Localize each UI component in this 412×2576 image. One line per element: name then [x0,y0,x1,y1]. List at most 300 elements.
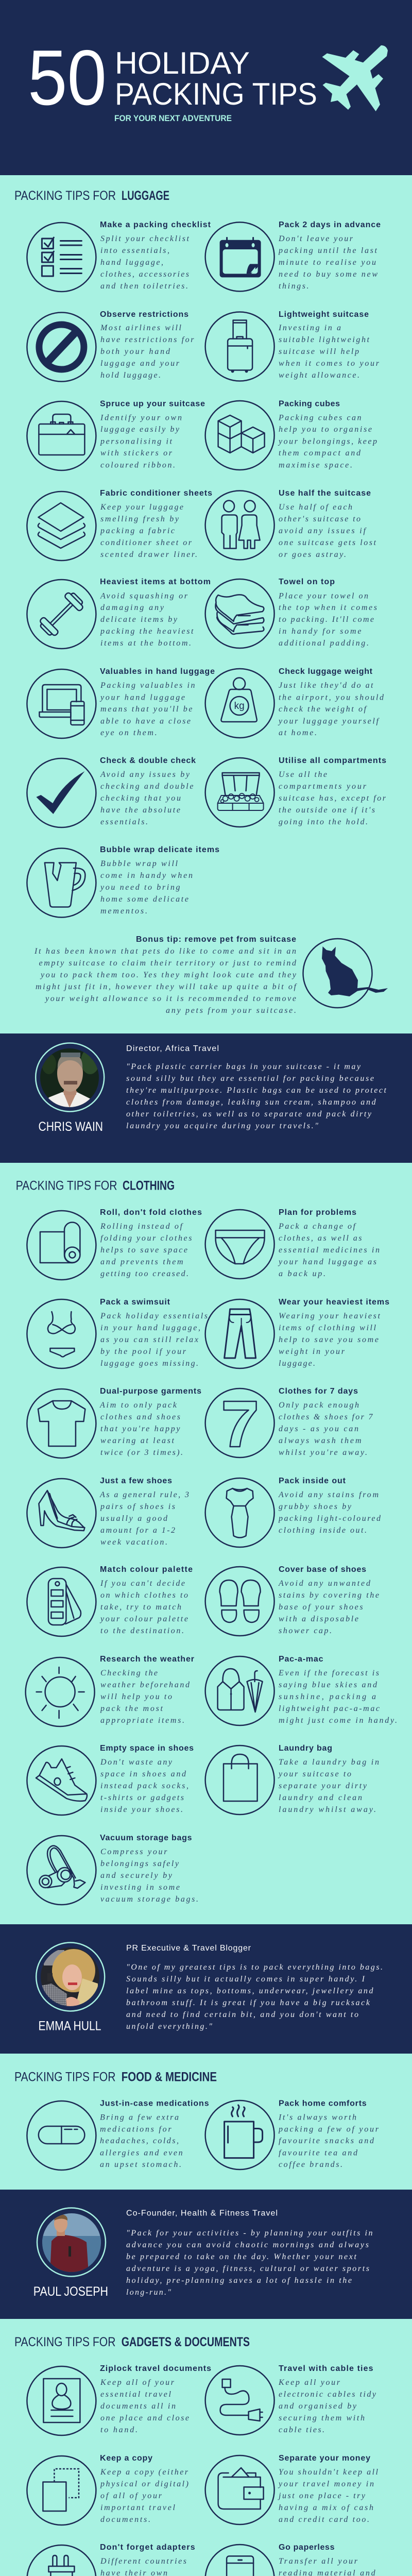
body text: inside your shoes. [100,1805,183,1814]
body text: means that you'll be [100,705,193,714]
body text [279,1401,373,1457]
body text: If you can't decide [100,1579,185,1588]
heading: Packing cubes [279,400,340,408]
body text: need to buy some new [279,270,377,279]
body text: physical or digital) [100,2480,188,2488]
body text: You shouldn't keep all [279,2468,379,2477]
panel: clothing tips [0,1163,412,1924]
body text: when it comes to your [279,359,380,368]
body text: always wash them [279,1436,362,1445]
icon: plug [27,2545,96,2576]
body text: packing a fabric [100,527,175,535]
body text: sunshine, packing a [279,1692,376,1701]
body text: your weight allowance so it is recommended to remove [44,994,296,1003]
body text: Packing cubes can [278,413,362,422]
body text [100,1758,188,1814]
body text: Pack a change of [278,1222,357,1231]
body text: one place and close [100,2414,189,2422]
body text: conditioner sheet or [100,538,192,547]
tip: valuables in hand luggage [27,667,215,738]
quote: advance you can avoid chaotic mornings and always [126,2241,369,2249]
heading: Make a packing checklist [100,221,211,229]
tip: packing cubes [205,400,377,470]
heading: packing tips for gadgets and documents: PACKING TIPS FOR [14,2335,115,2349]
body text: Avoid squashing or [100,591,188,600]
icon: shoe soles [205,1567,274,1636]
body text: packing until the last [278,246,377,255]
body text: take, try to match [100,1603,181,1612]
body text: clothes and shoes [100,1413,180,1421]
body text [100,2468,188,2524]
body text: empty suitcase to claim their territory or just to remind [39,959,297,968]
body text: them compact and [279,449,361,457]
body text: eye on them. [100,728,157,737]
body text: clothes & shoes for 7 [279,1413,373,1421]
heading: Travel with cable ties [279,2364,373,2373]
quote: holiday, pre-planning saves a lot of hassle in the [126,2276,352,2285]
body text: might just come in handy. [279,1716,397,1725]
body text: electronic cables tidy [279,2390,376,2399]
body text: packing light-coloured [278,1514,381,1523]
body text: and then toiletries. [100,282,188,291]
body text: going into the hold. [279,818,368,826]
body text: Split your checklist [100,234,190,243]
body text [278,2468,379,2524]
body text: additional padding. [279,639,369,648]
icon: briefs [205,1210,274,1279]
body text: your suitcase to [278,1770,351,1778]
tip: pack inside out [205,1477,381,1547]
body text [99,1401,183,1457]
body text: amount for a 1-2 [100,1526,175,1535]
quote: Sounds silly but it actually comes in super handy. I [126,1975,365,1984]
heading: Roll, don't fold clothes [100,1208,202,1217]
heading: Pack a swimsuit [100,1298,170,1307]
heading: packing tips for clothing: PACKING TIPS FOR [16,1178,117,1193]
body text: to packing. It'll come [279,615,374,624]
quote: long-run." [126,2288,171,2297]
heading: Go paperless [279,2543,335,2552]
body text: Take a laundry bag in [279,1758,379,1767]
body text: getting too creased. [100,1269,188,1278]
tip: observe restrictions [27,310,194,381]
tip: check luggage weight [205,667,384,738]
body text: weather beforehand [100,1681,190,1689]
body text: might just fit in, however they will take up quite a bit of [36,982,298,991]
body text [100,591,194,648]
photo: paul joseph [37,2208,106,2276]
body text [278,1669,397,1725]
body text: in handy for some [279,627,362,636]
heading: Laundry bag [279,1744,332,1753]
panel: quote chris wain [35,1042,386,1131]
body text: As a general rule, 3 [99,1490,189,1499]
icon: number seven [205,1388,274,1458]
panel: quote paul joseph [34,2207,372,2297]
heading: Pack home comforts [279,2099,367,2108]
quote: label mine as tops, bottoms, underwear, jewellery and [126,1987,374,1995]
body text [100,1222,192,1278]
body text: securing them with [279,2414,365,2422]
tip: heaviest items at bottom [27,578,211,649]
body text: delicate items by [100,615,178,624]
body text [278,1579,379,1635]
body text: twice (or 3 times). [100,1448,183,1457]
body text: help you to organise [279,425,372,434]
body text: coloured ribbon. [100,461,175,469]
body text: It's always worth [278,2113,356,2122]
body text [99,859,193,916]
body text: base of your shoes [279,1603,363,1612]
body text: personalising it [100,437,173,446]
body text [100,503,197,559]
body text: weight allowance. [279,371,359,380]
body text: suitcase will help [279,347,359,356]
body text: space in shoes and [100,1770,186,1778]
body text: and prevents them [100,1258,183,1266]
heading: Don't forget adapters [100,2543,195,2552]
body text: help to save you some [279,1335,379,1344]
body text [100,413,182,469]
body text: Only pack enough [279,1401,359,1410]
heading: Towel on top [279,578,335,586]
body text: suitcase has, except for [279,794,386,803]
heading: Just-in-case medications [100,2099,209,2108]
icon: cat [303,939,388,1008]
icon: document copy [27,2456,96,2525]
body text: the airport, you should [279,693,384,702]
body text: you need to bring [99,883,180,892]
body text: headaches, colds, [100,2137,179,2145]
body text: your travel money in [278,2480,374,2488]
body text [100,1312,208,1368]
heading: Bonus tip: remove pet from suitcase [136,935,296,944]
heading: Empty space in shoes [100,1744,194,1753]
tip: clothes for 7 days [205,1387,373,1458]
body text: clothing inside out. [279,1526,367,1535]
tip: keep a copy [27,2454,188,2525]
body text: days - as you can [279,1425,358,1433]
heading: Ziplock travel documents [100,2364,211,2373]
tip: separate your money [205,2454,379,2524]
heading: Valuables in hand luggage [100,667,215,676]
body text [34,947,298,1015]
body text: or goes astray. [279,550,346,559]
body text: as you can still relax [100,1335,198,1344]
body text: Identify your own [100,413,182,422]
body text [278,1222,380,1278]
tip: wear your heaviest items [205,1298,389,1368]
body text: hold luggage. [100,371,161,380]
body text: compartments your [279,782,367,791]
body text: items at the bottom. [100,639,191,648]
icon: checkmark [27,758,96,827]
body text: Avoid any unwanted [278,1579,371,1588]
photo: chris wain [36,1043,104,1112]
body text [100,770,194,826]
quote: "Pack for your activities - by planning your outfits in [126,2229,372,2238]
body text: both your hand [100,347,170,356]
icon: sun [26,1657,95,1726]
heading: Just a few shoes [100,1477,172,1485]
body text: minute to realise you [279,258,376,267]
icon: rolled fabric [27,1211,96,1280]
body text: usually a good [100,1514,168,1523]
title: holiday: HOLIDAY [115,46,250,80]
heading: Cover base of shoes [279,1565,366,1574]
role: PR Executive & Travel Blogger [126,1944,251,1953]
title: 50: 50 [28,34,107,122]
body text: Don't waste any [100,1758,173,1767]
heading: Clothes for 7 days [279,1387,358,1396]
body text: any pets from your suitcase. [166,1006,296,1015]
icon: steaming mug [205,2100,274,2170]
heading: Check luggage weight [279,667,373,676]
body text: favourite snacks and [279,2137,374,2145]
icon: vacuum cleaner [27,1836,96,1905]
icon: broken mug [27,848,96,917]
body text: essential travel [100,2390,171,2399]
name: EMMA HULL [38,2019,101,2033]
tip: pack a swimsuit [27,1298,208,1368]
body text: luggage easily by [100,425,180,434]
body text: an upset stomach. [100,2160,181,2169]
body text: Avoid any issues by [100,770,190,779]
body text: mementos. [100,907,147,916]
body text: Bring a few extra [100,2113,179,2122]
body text: that you're happy [100,1425,180,1433]
body text: Most airlines will [100,324,182,332]
body text: coffee brands. [279,2160,342,2169]
icon: id document [27,2366,96,2435]
icon: no sign [27,312,96,381]
quote: and need to find certain bit, and you don't want to [126,2010,358,2019]
tip: research the weather [26,1655,194,1726]
body text [278,1490,381,1535]
tip: packing checklist [27,221,211,292]
body text: into essentials, [100,246,169,255]
tip: pack home comforts [205,2099,379,2170]
heading: Pack 2 days in advance [279,221,381,229]
name: CHRIS WAIN [38,1120,103,1134]
body text [278,681,384,737]
icon: dumbbell [27,580,96,649]
body text: your belongings, keep [278,437,377,446]
icon: sneaker [27,1746,96,1815]
quote: bathroom stuff. It is great if you have a big rucksack [126,1998,370,2007]
body text: allergies and even [100,2149,183,2158]
body text: saying blue skies and [279,1681,377,1689]
name: PAUL JOSEPH [33,2284,108,2299]
heading: packing tips for luggage: LUGGAGE [122,189,169,203]
tip: match colour palette [27,1565,193,1636]
heading: Heaviest items at bottom [100,578,211,586]
body text: your luggage yourself [278,717,380,725]
body text: favourite tea and [279,2149,358,2158]
body text: the top when it comes [279,603,377,612]
heading: Pac-a-mac [279,1655,323,1664]
heading: Bubble wrap delicate items [100,845,219,854]
body text: will help you to [100,1692,172,1701]
body text: t-shirts or gadgets [100,1793,184,1802]
tip: fabric conditioner sheets [27,489,212,561]
quote: sound silly but they are essential for packing because [126,1074,374,1083]
body text: essential medicines in [279,1246,380,1255]
body text: damaging any [100,603,164,612]
quote: "One of my greatest tips is to pack everything into bags. [126,1963,383,1972]
body text: suitable lightweight [279,335,370,344]
icon: kg weight: kg [234,701,245,711]
body text [100,2557,189,2576]
quote: unfold everything." [126,2022,212,2031]
body text: your colour palette [99,1615,188,1623]
body text: shower cap. [279,1626,332,1635]
body text: by the pool if your [100,1347,186,1356]
body text: essentials. [100,818,148,826]
body text [279,2557,376,2576]
icon: calendar [205,222,274,291]
body text: Keep a copy (either [100,2468,188,2477]
body text [100,1848,198,1904]
quote: "Pack plastic carrier bags in your suitcase - it may [126,1062,361,1071]
body text: luggage and your [100,359,180,368]
heading: packing tips for food and medicine: PACKING TIPS FOR [14,2070,115,2084]
icon: couple [205,490,274,560]
tip: ziplock travel documents [27,2364,211,2435]
body text: vacuum storage bags. [100,1895,198,1904]
body text: come in handy when [100,871,193,880]
body text: Compress your [100,1848,167,1856]
quote: adventure is a yoga, fitness, cultural or water sports [126,2264,369,2273]
heading: Check & double check [100,756,196,765]
tip: towel on top [205,578,377,648]
body text: checking and double [100,782,194,791]
body text [278,591,377,648]
tip: just-in-case medications [27,2099,209,2170]
body text: instead pack socks, [100,1782,188,1790]
body text: the outside one if it's [279,806,375,815]
icon: briefcase [27,401,96,470]
heading: packing tips for luggage: PACKING TIPS FOR [14,189,116,203]
body text: helps to save space [100,1246,187,1255]
body text [100,2113,183,2169]
body text: check the weight of [279,705,368,714]
body text: and organised by [279,2402,357,2411]
tip: just a few shoes [27,1477,189,1548]
icon: stacked sheets [27,492,96,561]
heading: packing tips for food and medicine: FOOD & MEDICINE [122,2070,217,2084]
body text: lightweight pac-a-mac [279,1704,380,1713]
tip: bonus remove pet from suitcase [34,935,388,1015]
tip: roll don't fold [27,1208,202,1280]
panel: gadgets and documents tips [0,2319,412,2576]
heading: Research the weather [100,1655,194,1664]
body text: to the destination. [100,1626,184,1635]
body text: laundry whilst away. [279,1805,376,1814]
heading: packing tips for clothing: CLOTHING [123,1178,175,1193]
body text: grubby shoes by [279,1502,352,1511]
tip: bubble wrap delicate items [27,845,219,917]
body text [100,324,194,380]
icon: colour swatch [27,1567,96,1636]
body text [100,1669,190,1725]
icon: wallet [205,2455,274,2524]
quote: clothes from damage, leaking sun cream, shampoo and [126,1098,376,1107]
body text: of all of your [100,2492,162,2500]
icon: kg weight [205,669,274,738]
heading: packing tips for food and medicine [14,2070,217,2084]
body text: documents. [100,2515,150,2524]
tip: use half the suitcase [205,489,376,560]
quote: be prepared to take on the day. Whether your next [126,2252,357,2261]
body text: Keep all your [278,2378,340,2387]
body text [99,1490,189,1547]
body text: Place your towel on [278,591,368,600]
body text [278,234,377,291]
body text: smelling fresh by [100,515,179,523]
quote: they're multipurpose. Plastic bags can be used to protect [126,1086,387,1095]
body text: luggage. [279,1359,315,1368]
heading: Vacuum storage bags [100,1834,192,1842]
heading: Separate your money [279,2454,370,2463]
icon: pill [27,2101,96,2170]
heading: Observe restrictions [100,310,188,319]
body text: at home. [279,728,317,737]
body text: with stickers or [100,449,173,457]
tip: pack 2 days in advance [205,221,381,291]
icon: trousers [205,1299,274,1368]
body text: one suitcase gets lost [279,538,376,547]
heading: Spruce up your suitcase [100,400,205,408]
body text [100,234,190,291]
body text: Use all the [279,770,327,779]
heading: Wear your heaviest items [279,1298,389,1307]
body text: and credit card too. [279,2515,369,2524]
body text: packing a few of your [278,2125,379,2134]
body text: cable ties. [279,2426,324,2434]
body text: Just like they'd do at [279,681,373,690]
tip: vacuum storage bags [27,1834,198,1905]
body text: maximise space. [279,461,352,469]
body text: whilst you're away. [279,1448,367,1457]
quote [126,1062,387,1130]
tip: don't forget adapters [27,2543,195,2576]
tip: go paperless [205,2543,376,2576]
role: Co-Founder, Health & Fitness Travel [126,2209,278,2218]
body text: appropriate items. [100,1716,184,1725]
body text: Bubble wrap will [100,859,178,868]
body text: scented drawer liner. [100,550,197,559]
heading: Dual-purpose garments [100,1387,201,1396]
heading: Match colour palette [100,1565,193,1574]
body text: pack the most [100,1704,163,1713]
body text: luggage goes missing. [100,1359,198,1368]
body text [278,2378,376,2434]
body text [278,324,380,380]
heading: Utilise all compartments [279,756,386,765]
body text: laundry and clean [279,1793,362,1802]
heading: Fabric conditioner sheets [100,489,212,498]
body text [278,1758,379,1814]
body text: hand luggage, [100,258,163,267]
panel: header [0,0,412,175]
body text [278,413,377,469]
body text: Different countries [100,2557,186,2566]
heading: Plan for problems [279,1208,356,1217]
body text: It has been known that pets do like to come and sit in an [34,947,296,956]
body text [279,503,376,559]
body text: Use half of each [279,503,352,512]
